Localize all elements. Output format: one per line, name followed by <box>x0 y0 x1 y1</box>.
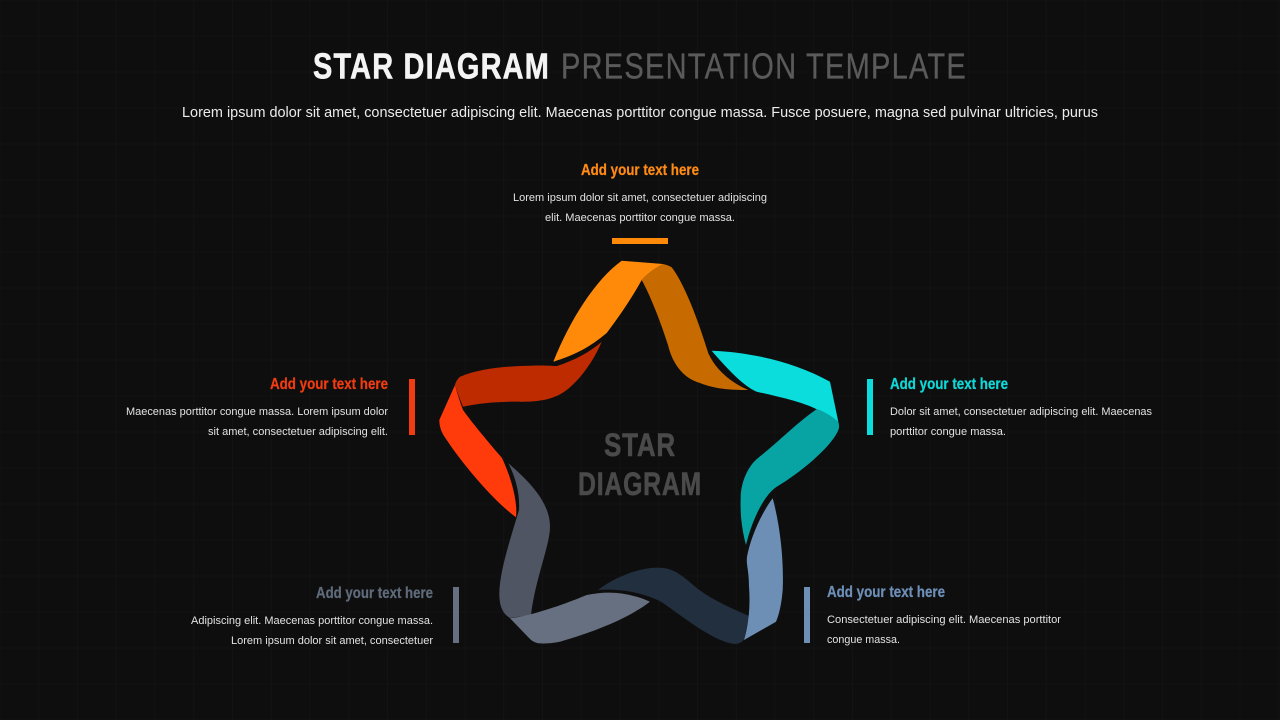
star diagram <box>439 261 839 644</box>
callout: right <box>867 376 1152 438</box>
callout: top: elit. Maecenas porttitor congue massa. <box>545 212 735 224</box>
ribbon: red <box>439 385 516 517</box>
callout: top: Add your text here <box>581 162 699 179</box>
callout: bottom right: Add your text here <box>827 584 945 601</box>
title: STAR DIAGRAM <box>313 46 550 86</box>
title: PRESENTATION TEMPLATE <box>561 46 967 86</box>
callout: bottom left: Adipiscing elit. Maecenas porttitor congue massa. <box>191 615 433 627</box>
center label: STAR <box>604 427 676 463</box>
ribbon: cyan <box>712 351 838 422</box>
callout: left: sit amet, consectetuer adipiscing elit. <box>208 426 388 438</box>
subtitle: Lorem ipsum dolor sit amet, consectetuer adipiscing elit. Maecenas porttitor congue massa. Fusce posuere, magna sed pulvinar ultricies, purus <box>182 105 1098 121</box>
ribbon: orange <box>553 261 663 362</box>
ribbon: dark slate <box>499 463 550 618</box>
ribbon: dark red <box>455 342 602 407</box>
callout: bottom right: Consectetuer adipiscing elit. Maecenas porttitor <box>827 614 1061 626</box>
callout: right: porttitor congue massa. <box>890 426 1006 438</box>
title <box>313 46 967 86</box>
callout: bottom left: Lorem ipsum dolor sit amet, consectetuer <box>231 635 433 647</box>
ribbon: slate <box>510 593 650 643</box>
ribbon: navy <box>598 568 749 644</box>
ribbon: steel blue <box>744 498 783 640</box>
callout: bottom left: Add your text here <box>316 585 433 602</box>
callout: left: Maecenas porttitor congue massa. Lorem ipsum dolor <box>126 406 388 418</box>
callout: left <box>126 376 415 438</box>
ribbon: teal <box>741 409 839 545</box>
callout: top: Lorem ipsum dolor sit amet, consectetuer adipiscing <box>513 192 767 204</box>
callout: right: Dolor sit amet, consectetuer adipiscing elit. Maecenas <box>890 406 1152 418</box>
callout: bottom right: congue massa. <box>827 634 900 646</box>
ribbon: dark orange <box>642 264 748 390</box>
callout: bottom left <box>191 585 459 647</box>
callout: bottom right <box>804 584 1061 646</box>
callout: top <box>513 162 767 244</box>
callout: left: Add your text here <box>270 376 388 393</box>
center label: DIAGRAM <box>578 466 702 502</box>
center label <box>578 427 702 502</box>
callout: right: Add your text here <box>890 376 1008 393</box>
